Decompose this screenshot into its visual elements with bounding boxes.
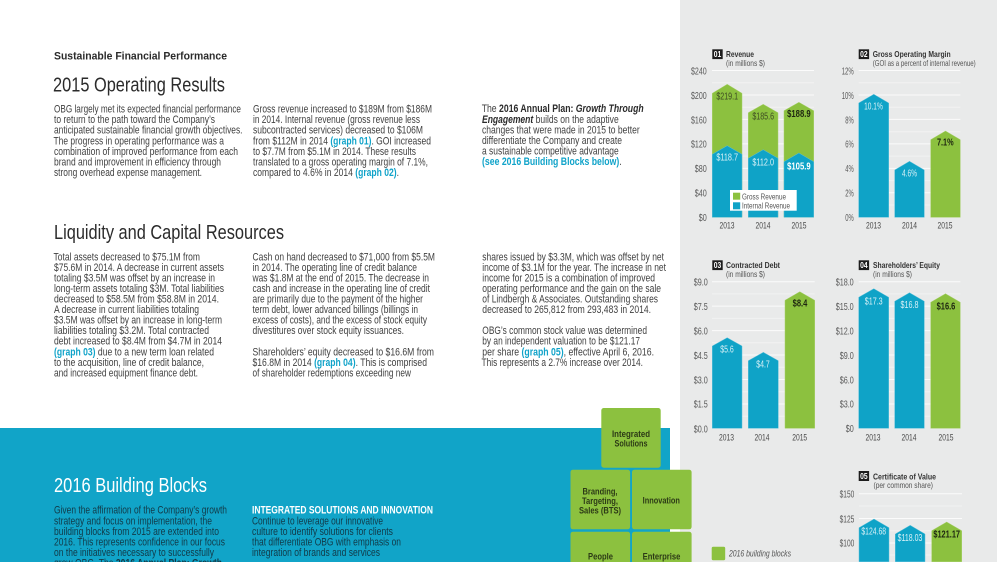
text block: operating results column 1: The progress in operating performance was a bbox=[54, 135, 224, 147]
chart title: (per common share) bbox=[874, 480, 933, 490]
text block: 2016 annual plan callout: a sustainable competitive advantage bbox=[482, 145, 619, 157]
bars: internal revenue bbox=[712, 146, 814, 217]
x axis bbox=[866, 220, 952, 232]
chart title bbox=[859, 49, 976, 68]
y axis: 0% bbox=[845, 213, 854, 224]
chart title: 03 bbox=[714, 261, 722, 270]
y axis: $9.0 bbox=[694, 277, 708, 288]
chart title: Certificate of Value bbox=[873, 471, 936, 481]
panel: 2016 building blocks band bbox=[0, 428, 670, 562]
panel: charts sidebar background bbox=[680, 0, 997, 562]
text block: liquidity column 1: $75.6M in 2014. A decrease in current assets bbox=[54, 262, 224, 274]
y axis bbox=[840, 489, 855, 550]
value labels bbox=[864, 101, 954, 180]
text block: liquidity column 2: excess of costs), and the excess of stock equity bbox=[252, 315, 428, 327]
value labels: $17.3 bbox=[865, 296, 883, 307]
y axis: 4% bbox=[845, 164, 854, 175]
y axis: $160 bbox=[691, 115, 707, 126]
x axis: 2014 bbox=[902, 432, 916, 444]
text block: liquidity column 2: cash and increase in the operating line of credit bbox=[252, 283, 430, 295]
value labels: $188.9 bbox=[787, 109, 811, 120]
y axis: $150 bbox=[840, 489, 855, 500]
y axis: $6.0 bbox=[840, 375, 854, 386]
text block: operating results column 2: subcontracted services) decreased to $106M bbox=[253, 125, 423, 137]
y axis: $100 bbox=[840, 539, 855, 550]
y axis: $0 bbox=[846, 424, 854, 435]
text block: operating results column 2: compared to 4.6% in 2014 (graph 02). bbox=[253, 167, 399, 179]
x axis: 2013 bbox=[866, 432, 880, 444]
chart 04: shareholders' equity bbox=[836, 260, 960, 444]
text block: 2016 annual plan callout: changes that were made in 2015 to better bbox=[482, 124, 640, 136]
text block: building blocks intro: 2016. This represents confidence in our focus bbox=[54, 536, 225, 548]
value labels: $4.7 bbox=[756, 359, 770, 370]
y axis bbox=[842, 67, 854, 224]
text block: liquidity column 3: income for 2015 is a combination of improved bbox=[482, 272, 655, 284]
text block: liquidity column 1: debt increased to $8.4M from $4.7M in 2014 bbox=[54, 336, 222, 348]
text block: integrated solutions and innovation bbox=[252, 505, 433, 559]
text block: operating results column 1: OBG largely met its expected financial performance bbox=[54, 104, 241, 116]
chart title bbox=[859, 260, 940, 279]
chart 05: certificate of value bbox=[840, 471, 962, 562]
legend: 2016 building blocks bbox=[712, 547, 791, 560]
chart title: (in millions $) bbox=[873, 269, 912, 279]
text block: integrated solutions and innovation: integration of brands and services bbox=[252, 547, 380, 559]
bars bbox=[859, 519, 962, 562]
text block: operating results column 1 bbox=[54, 104, 242, 179]
text block: building blocks intro: building blocks from 2015 are extended into bbox=[54, 526, 219, 538]
y axis bbox=[691, 66, 707, 224]
text block: liquidity column 3: income of $3.1M for the year. The increase in net bbox=[482, 262, 666, 274]
block: integrated solutions bbox=[601, 408, 661, 468]
text block: liquidity column 1: $3.5M was offset by an increase in long-term bbox=[54, 315, 222, 327]
value labels: $112.0 bbox=[752, 157, 774, 168]
block: people bbox=[570, 532, 630, 562]
y axis: $120 bbox=[691, 140, 707, 151]
value labels bbox=[720, 299, 808, 370]
text block: 2016 annual plan callout: (see 2016 Building Blocks below). bbox=[482, 156, 622, 168]
text block: liquidity column 1: A decrease in current liabilities totaling bbox=[54, 304, 199, 316]
text block: integrated solutions and innovation: culture to identify solutions for clients bbox=[252, 526, 393, 538]
block: innovation: Innovation bbox=[643, 496, 680, 506]
legend: Internal Revenue bbox=[742, 201, 790, 211]
y axis: $9.0 bbox=[840, 351, 854, 362]
legend: 2016 building blocks: 2016 building blocks bbox=[728, 548, 791, 559]
chart title: (in millions $) bbox=[726, 58, 765, 68]
y axis: 10% bbox=[842, 91, 854, 102]
block: innovation bbox=[632, 470, 692, 529]
chart title bbox=[859, 471, 936, 490]
block: integrated solutions: Solutions bbox=[614, 438, 648, 450]
text block: liquidity column 1: liabilities totaling $3.2M. Total contracted bbox=[54, 325, 209, 337]
text block: operating results column 2 bbox=[253, 104, 432, 179]
y axis: $1.5 bbox=[694, 400, 708, 411]
y axis: $200 bbox=[691, 91, 707, 102]
value labels bbox=[861, 526, 960, 544]
text block: building blocks intro: on the initiatives necessary to successfully bbox=[54, 547, 215, 559]
text block: building blocks intro: strategy and focus on implementation, the bbox=[54, 515, 212, 527]
section label: Sustainable Financial Performance bbox=[54, 50, 227, 62]
x axis: 2013 bbox=[719, 432, 734, 444]
text block: liquidity column 2: $16.8M in 2014 (graph 04). This is comprised bbox=[252, 357, 427, 369]
block: branding, targeting, sales bbox=[570, 470, 630, 529]
text block: liquidity column 1: Total assets decreased to $75.1M from bbox=[54, 251, 200, 263]
value labels: 7.1% bbox=[937, 137, 954, 148]
value labels bbox=[716, 92, 811, 172]
y axis: $0 bbox=[699, 213, 707, 224]
chart 01: revenue bbox=[691, 49, 814, 232]
text block: operating results column 1: strong overhead expense management. bbox=[54, 167, 202, 179]
chart title: Revenue bbox=[726, 49, 754, 59]
y axis: $6.0 bbox=[694, 326, 708, 338]
y axis: $18.0 bbox=[836, 277, 854, 288]
x axis: 2015 bbox=[792, 220, 806, 232]
x axis: 2014 bbox=[902, 220, 917, 232]
bars bbox=[859, 289, 960, 428]
text block: liquidity column 2 bbox=[252, 251, 435, 379]
text block: operating results column 1: combination of improved performance from each bbox=[54, 146, 238, 158]
diagram: building blocks bbox=[570, 408, 692, 562]
legend bbox=[730, 190, 797, 211]
value labels: 4.6% bbox=[902, 169, 917, 180]
text block: integrated solutions and innovation: Continue to leverage our innovative bbox=[252, 515, 383, 527]
text block: liquidity column 2: of shareholder redemptions exceeding new bbox=[252, 367, 411, 379]
text block: operating results column 1: brand and improvement in efficiency through bbox=[54, 156, 221, 168]
block: branding, targeting, sales: Branding, bbox=[582, 486, 618, 498]
text block: liquidity column 1: (graph 03) due to a new term loan related bbox=[54, 346, 214, 358]
text block: liquidity column 2: Cash on hand decreased to $71,000 from $5.5M bbox=[252, 251, 435, 263]
text block: liquidity column 1 bbox=[54, 251, 224, 379]
text block: 2016 annual plan callout: differentiate the Company and create bbox=[482, 135, 622, 147]
chart title: 01 bbox=[714, 50, 722, 59]
y axis: $0.0 bbox=[694, 424, 708, 435]
text block: 2016 annual plan callout: Engagement builds on the adaptive bbox=[482, 114, 619, 126]
text block: 2016 annual plan callout: The 2016 Annual Plan: Growth Through bbox=[482, 103, 644, 115]
text block: liquidity column 2: are primarily due to the payment of the higher bbox=[252, 294, 423, 306]
chart title: Contracted Debt bbox=[726, 260, 780, 270]
text block: liquidity column 1: and increased equipment finance debt. bbox=[54, 367, 198, 379]
text block: building blocks intro bbox=[54, 505, 227, 562]
x axis: 2013 bbox=[866, 220, 881, 232]
block: integrated solutions: Integrated bbox=[612, 429, 650, 440]
chart title: Shareholders’ Equity bbox=[873, 260, 940, 270]
text block: operating results column 2: Gross revenue increased to $189M from $186M bbox=[253, 104, 432, 116]
text block: liquidity column 1: decreased to $58.5M from $58.8M in 2014. bbox=[54, 294, 219, 306]
text block: liquidity column 3: by an independent valuation to be $121.17 bbox=[482, 336, 640, 348]
y axis: $3.0 bbox=[694, 375, 708, 386]
text block: liquidity column 1: totaling $3.5M was offset by an increase in bbox=[54, 272, 215, 284]
chart title bbox=[712, 260, 780, 279]
y axis bbox=[694, 277, 708, 435]
text block: operating results column 2: translated to a gross operating margin of 7.1%, bbox=[253, 156, 428, 168]
text block: integrated solutions and innovation: that differentiate OBG with emphasis on bbox=[252, 536, 401, 548]
block: branding, targeting, sales: Sales (BTS) bbox=[579, 506, 621, 516]
value labels: $185.6 bbox=[752, 111, 774, 122]
text block: operating results column 2: in 2014. Internal revenue (gross revenue less bbox=[253, 114, 420, 126]
x axis bbox=[866, 432, 954, 444]
value labels: $121.17 bbox=[933, 529, 960, 540]
text block: operating results column 1: to return to the path toward the Company’s bbox=[54, 114, 215, 126]
value labels: $5.6 bbox=[720, 345, 734, 356]
text block: liquidity column 3: shares issued by $3.3M, which was offset by net bbox=[482, 251, 664, 263]
value labels: $219.1 bbox=[716, 92, 738, 103]
chart 03: contracted debt bbox=[694, 260, 815, 444]
text block: liquidity column 2: divestitures over stock equity issuances. bbox=[252, 325, 404, 337]
chart title: 02 bbox=[860, 50, 868, 59]
x axis bbox=[720, 220, 806, 232]
y axis: $4.5 bbox=[694, 351, 708, 362]
chart title: 04 bbox=[860, 261, 868, 270]
y axis: $40 bbox=[695, 188, 707, 200]
text block: operating results column 1: anticipated sustainable financial growth objectives. bbox=[54, 125, 242, 137]
chart title: (in millions $) bbox=[726, 269, 765, 279]
x axis: 2015 bbox=[792, 432, 807, 444]
y axis: $7.5 bbox=[694, 302, 708, 313]
legend: Gross Revenue bbox=[742, 191, 786, 201]
value labels: $105.9 bbox=[787, 161, 811, 172]
text block: liquidity column 2: in 2014. The operating line of credit balance bbox=[252, 262, 417, 274]
y axis bbox=[836, 277, 854, 435]
text block: operating results column 2: from $112M in 2014 (graph 01). GOI increased bbox=[253, 135, 431, 147]
heading: 2016 Building Blocks: 2016 Building Blocks bbox=[54, 474, 207, 497]
y axis: $240 bbox=[691, 66, 707, 77]
value labels: $16.6 bbox=[937, 301, 956, 312]
value labels: $118.03 bbox=[898, 533, 923, 544]
x axis: 2014 bbox=[754, 432, 770, 444]
text block: liquidity column 2: was $1.8M at the end of 2015. The decrease in bbox=[252, 272, 429, 284]
y axis: 12% bbox=[842, 67, 854, 78]
value labels: 10.1% bbox=[864, 101, 883, 112]
value labels bbox=[865, 296, 956, 312]
text block: liquidity column 3: decreased to 265,812 from 293,483 in 2014. bbox=[482, 304, 651, 316]
block: branding, targeting, sales: Targeting, bbox=[582, 496, 618, 507]
text block: operating results column 2: to $7.7M from $5.1M in 2014. These results bbox=[253, 146, 416, 158]
value labels: $16.8 bbox=[900, 300, 919, 311]
x axis: 2015 bbox=[938, 432, 954, 444]
value labels: $124.68 bbox=[861, 526, 886, 537]
text block: 2016 annual plan callout bbox=[482, 103, 644, 168]
x axis: 2015 bbox=[938, 220, 952, 232]
text block: liquidity column 3: operating performance and the gain on the sale bbox=[482, 283, 661, 295]
bars bbox=[712, 292, 815, 428]
value labels: $8.4 bbox=[793, 299, 808, 310]
text block: building blocks intro: Given the affirmation of the Company’s growth bbox=[54, 505, 227, 517]
y axis: $80 bbox=[695, 164, 707, 175]
x axis bbox=[719, 432, 807, 444]
y axis: $15.0 bbox=[836, 302, 854, 313]
text block: liquidity column 3 bbox=[482, 251, 666, 369]
text block: liquidity column 2: term debt, lower advanced billings (billings in bbox=[252, 304, 418, 316]
text block: liquidity column 3: This represents a 2.7% increase over 2014. bbox=[482, 357, 643, 369]
text block: liquidity column 2: Shareholders’ equity decreased to $16.6M from bbox=[252, 346, 434, 358]
text block: liquidity column 1: to the acquisition, line of credit balance, bbox=[54, 357, 204, 369]
y axis: $125 bbox=[840, 514, 855, 525]
y axis: $3.0 bbox=[840, 400, 854, 411]
text block: liquidity column 3: of Lindbergh & Associates. Outstanding shares bbox=[482, 294, 658, 306]
x axis: 2013 bbox=[720, 220, 734, 232]
chart title: Gross Operating Margin bbox=[873, 49, 951, 59]
block: enterprise bbox=[632, 532, 692, 562]
text block: liquidity column 3: per share (graph 05), effective April 6, 2016. bbox=[482, 346, 654, 358]
y axis: 2% bbox=[845, 188, 854, 200]
x axis: 2014 bbox=[756, 220, 770, 232]
heading: Liquidity and Capital Resources: Liquidity and Capital Resources bbox=[54, 221, 284, 244]
y axis: 8% bbox=[845, 116, 854, 126]
bars: gross revenue bbox=[712, 84, 814, 217]
text block: liquidity column 3: OBG’s common stock value was determined bbox=[482, 325, 647, 337]
value labels: $118.7 bbox=[716, 153, 738, 164]
text block: integrated solutions and innovation: INTEGRATED SOLUTIONS AND INNOVATION bbox=[252, 505, 433, 517]
chart title: 05 bbox=[860, 472, 868, 481]
bars bbox=[859, 94, 960, 217]
text block: liquidity column 1: long-term assets totaling $3M. Total liabilities bbox=[54, 283, 224, 295]
y axis: 6% bbox=[845, 140, 854, 151]
heading: 2015 Operating Results: 2015 Operating Results bbox=[53, 74, 225, 97]
chart title bbox=[712, 49, 765, 68]
chart 02: gross operating margin bbox=[842, 49, 976, 232]
y axis: $12.0 bbox=[836, 326, 854, 338]
